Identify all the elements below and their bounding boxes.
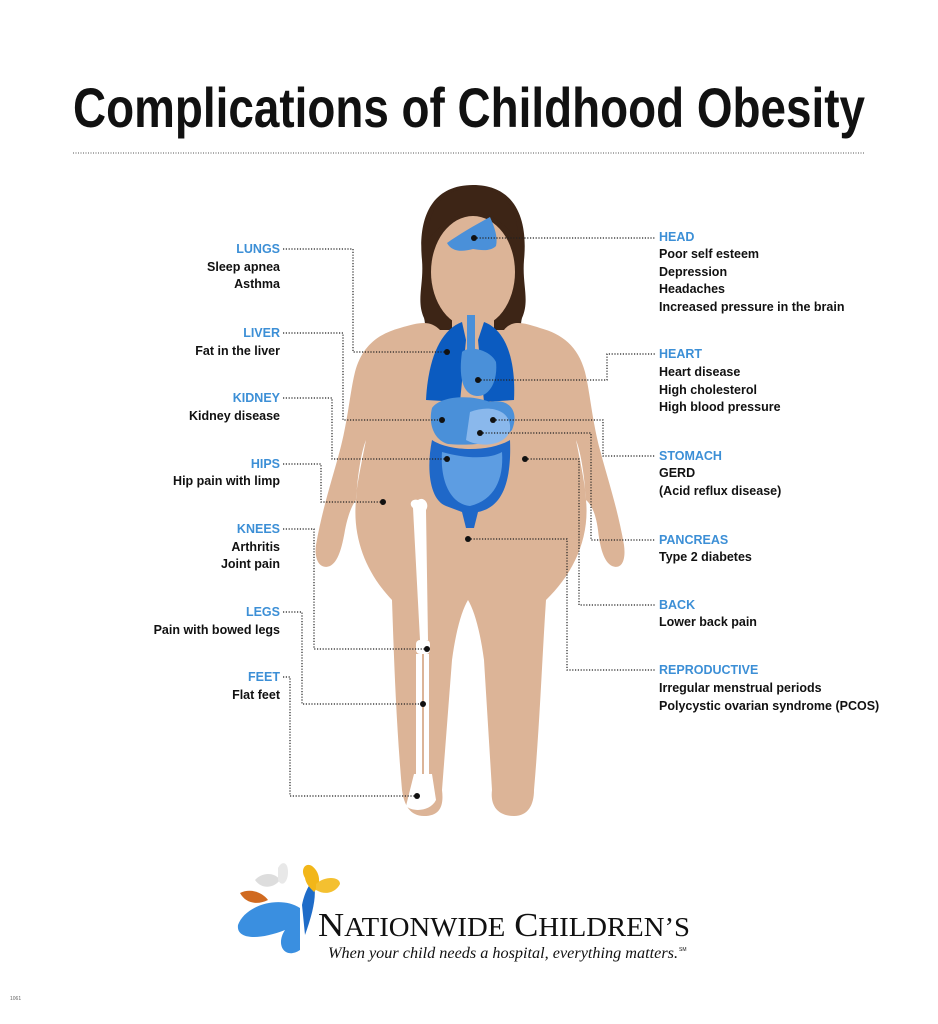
left labels: Joint pain (221, 557, 280, 571)
right labels: HEAD (659, 230, 694, 244)
left labels: Flat feet (232, 688, 281, 702)
dots (380, 235, 528, 799)
right labels: Lower back pain (659, 615, 757, 629)
left labels: Sleep apnea (207, 260, 281, 274)
skin body (316, 323, 624, 816)
right labels: Depression (659, 265, 727, 279)
logo: SM (679, 947, 686, 953)
left labels: FEET (248, 670, 280, 684)
figure: child body (316, 185, 624, 816)
liver / stomach (431, 397, 515, 445)
leg bones (406, 499, 436, 810)
left labels: Hip pain with limp (173, 474, 280, 488)
right labels: High blood pressure (659, 400, 781, 414)
right labels: BACK (659, 598, 695, 612)
hair back (420, 185, 526, 350)
left labels: Arthritis (231, 540, 280, 554)
arm gaps (356, 440, 366, 500)
right labels: HEART (659, 347, 702, 361)
right labels: High cholesterol (659, 383, 757, 397)
left labels: LEGS (246, 605, 280, 619)
left labels: LIVER (243, 326, 280, 340)
leader lines (283, 238, 655, 796)
face (431, 216, 515, 328)
right labels: Headaches (659, 282, 725, 296)
text: 1061 (10, 996, 21, 1002)
trachea and heart (467, 315, 475, 355)
right labels: Polycystic ovarian syndrome (PCOS) (659, 699, 879, 713)
right labels: Heart disease (659, 365, 740, 379)
right labels: Increased pressure in the brain (659, 300, 844, 314)
left labels: HIPS (251, 457, 280, 471)
left labels: Fat in the liver (195, 344, 280, 358)
right labels: GERD (659, 466, 695, 480)
right labels: Irregular menstrual periods (659, 681, 822, 695)
right labels: (Acid reflux disease) (659, 484, 781, 498)
left labels: Kidney disease (189, 409, 280, 423)
left labels: LUNGS (236, 242, 280, 256)
right labels: Type 2 diabetes (659, 550, 752, 564)
butterflies (238, 902, 300, 953)
logo: When your child needs a hospital, everything matters. (328, 945, 678, 962)
brain (447, 217, 497, 251)
lungs (426, 322, 466, 402)
logo: NATIONWIDE CHILDREN’S (318, 907, 690, 944)
left labels: Pain with bowed legs (154, 623, 280, 637)
right labels (659, 230, 879, 713)
hair top (428, 188, 518, 240)
left labels (154, 242, 281, 702)
right labels: REPRODUCTIVE (659, 663, 758, 677)
right labels: Poor self esteem (659, 247, 759, 261)
logo (238, 863, 690, 962)
intestines (429, 440, 510, 528)
right labels: PANCREAS (659, 533, 728, 547)
left labels: Asthma (234, 277, 281, 291)
left labels: KNEES (237, 522, 280, 536)
left labels: KIDNEY (233, 391, 281, 405)
right labels: STOMACH (659, 449, 722, 463)
